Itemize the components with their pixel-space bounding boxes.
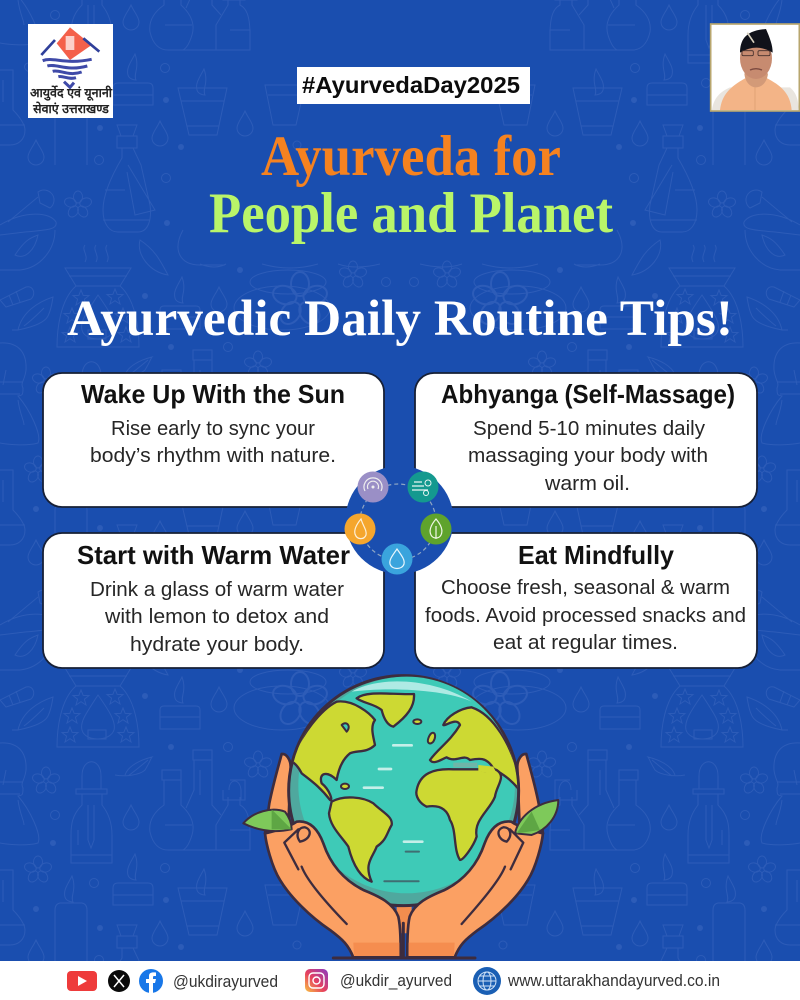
logo: Ayurveda department	[28, 24, 113, 118]
text: warm water: with lemon to detox and	[104, 605, 329, 628]
text: eat mindfully	[425, 540, 746, 654]
hashtag badge	[297, 67, 530, 104]
title	[209, 125, 613, 245]
text: eat mindfully: Eat Mindfully	[518, 540, 675, 570]
handle: instagram: @ukdir_ayurved	[340, 972, 452, 990]
website url: www.uttarakhandayurved.co.in	[507, 972, 720, 990]
text: warm water: hydrate your body.	[130, 633, 304, 656]
hashtag badge: #AyurvedaDay2025	[302, 72, 520, 98]
text: eat mindfully: foods. Avoid processed snacks and	[425, 604, 746, 627]
text: eat mindfully: eat at regular times.	[493, 631, 678, 654]
card: wake up	[43, 373, 384, 507]
text: abhyanga: Spend 5-10 minutes daily	[473, 417, 706, 440]
text: warm water	[77, 540, 350, 656]
icon: website globe	[473, 967, 501, 995]
text: abhyanga: massaging your body with	[468, 444, 708, 467]
icon: earth leaf	[420, 514, 452, 544]
card: warm water	[43, 533, 384, 668]
text: wake up with the sun	[81, 379, 345, 467]
text: wake up with the sun: Rise early to sync your	[111, 417, 315, 440]
icon: water	[382, 544, 412, 574]
logo: Ayurveda department: सेवाएं उत्तराखण्ड	[32, 101, 110, 116]
text: abhyanga: warm oil.	[544, 472, 630, 495]
illustration: hands holding globe	[243, 676, 558, 958]
heading: daily routine tips: Ayurvedic Daily Routine Tips!	[67, 291, 733, 347]
text: abhyanga: Abhyanga (Self-Massage)	[441, 379, 735, 409]
title: Ayurveda for	[261, 125, 561, 188]
logo: Ayurveda department: आयुर्वेद एवं यूनानी	[30, 85, 113, 101]
icon: instagram	[305, 969, 328, 992]
five elements wheel	[344, 466, 454, 574]
text: warm water: Start with Warm Water	[77, 540, 350, 570]
handle: facebook and x: @ukdirayurved	[173, 973, 278, 991]
title: People and Planet	[209, 182, 613, 245]
text: wake up with the sun: body’s rhythm with nature.	[90, 444, 336, 467]
text: wake up with the sun: Wake Up With the Sun	[81, 379, 345, 409]
icon: air	[408, 472, 438, 502]
icon: facebook	[139, 969, 163, 993]
icon: X	[108, 970, 130, 992]
card: eat mindfully	[415, 533, 757, 668]
icon: ether	[358, 472, 388, 502]
portrait photo	[711, 24, 799, 111]
text: abhyanga	[441, 379, 735, 495]
icon: fire	[344, 514, 376, 544]
text: warm water: Drink a glass of warm water	[90, 578, 344, 601]
card: abhyanga	[415, 373, 757, 507]
icon: youtube	[67, 971, 97, 991]
text: eat mindfully: Choose fresh, seasonal & warm	[441, 576, 730, 599]
footer bar	[0, 961, 800, 1000]
